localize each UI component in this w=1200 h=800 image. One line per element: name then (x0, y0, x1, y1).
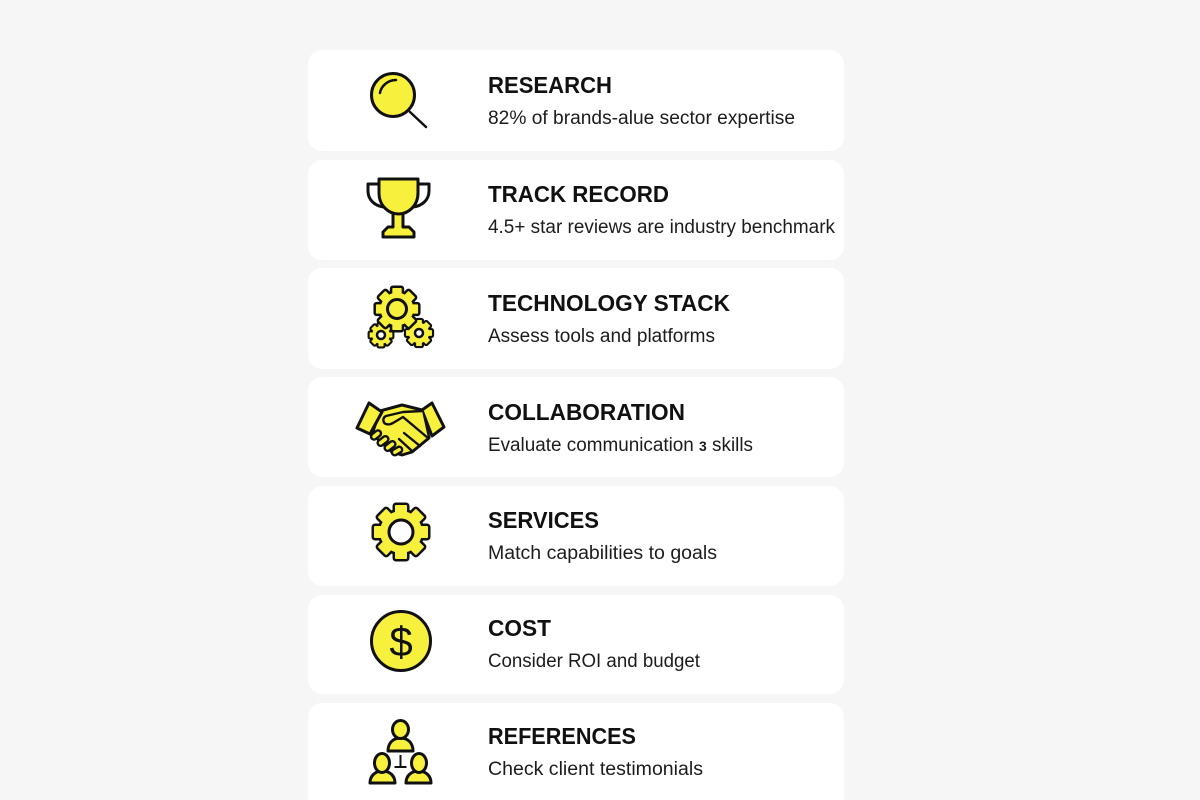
icon: dollar coin: $ (389, 618, 413, 665)
heading: research: RESEARCH (488, 72, 612, 98)
icon: trophy (368, 179, 429, 237)
panel: cost (308, 595, 844, 694)
text: track record detail: 4.5+ star reviews are industry benchmark (488, 217, 835, 238)
panel: references (308, 703, 844, 800)
panel: research (308, 50, 844, 151)
text: technology stack detail: Assess tools and platforms (488, 326, 715, 347)
icon: gear (374, 505, 428, 559)
text: references detail: Check client testimonials (488, 759, 703, 780)
fingers (370, 429, 403, 456)
heading: technology stack: TECHNOLOGY STACK (488, 290, 730, 316)
icon: dollar coin (372, 612, 430, 670)
heading: references: REFERENCES (488, 723, 636, 749)
heading: collaboration: COLLABORATION (488, 399, 685, 425)
panel: services (308, 486, 844, 586)
text: cost detail: Consider ROI and budget (488, 651, 701, 672)
icon: three gears (370, 288, 432, 346)
text: research detail: 82% of brands-alue sector expertise (488, 108, 795, 129)
heading: services: SERVICES (488, 507, 599, 533)
icon: magnifying glass (372, 74, 426, 127)
text: services detail: Match capabilities to goals (488, 543, 717, 564)
panel: track record (308, 160, 844, 260)
heading: cost: COST (488, 615, 552, 641)
icon: people network (370, 720, 431, 783)
panel: collaboration (308, 377, 844, 477)
heading: track record: TRACK RECORD (488, 181, 669, 207)
icon: handshake (357, 403, 444, 456)
panel: technology stack (308, 268, 844, 369)
text: collaboration detail: Evaluate communication 3 skills (488, 435, 753, 456)
